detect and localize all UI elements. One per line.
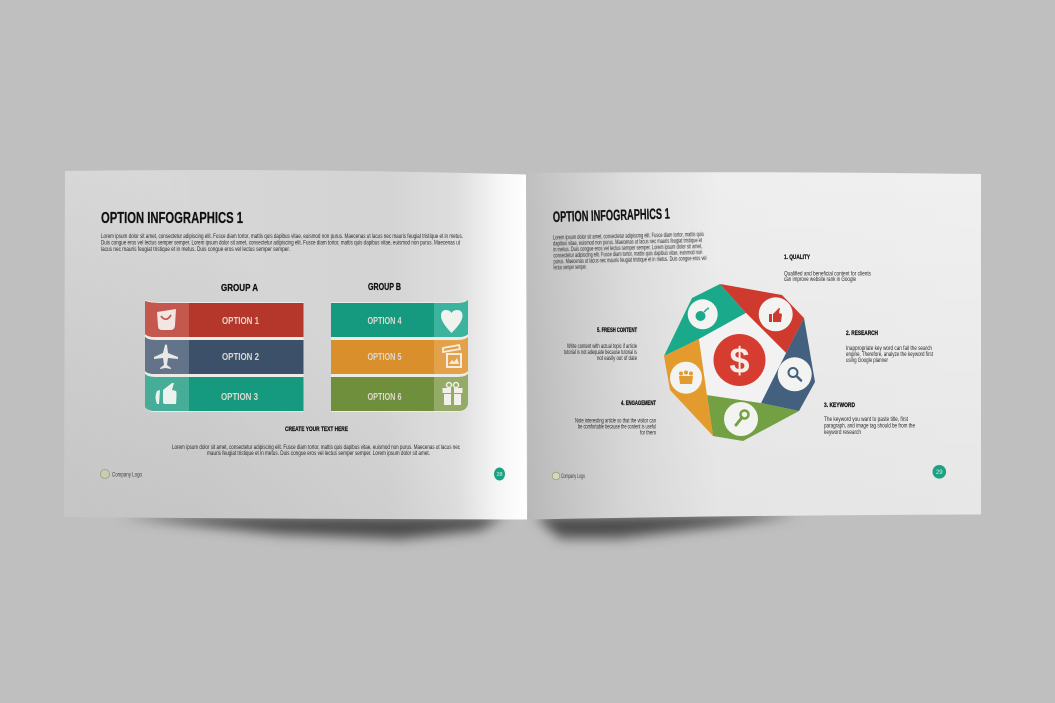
label: 5 fresh content: not easily out of date — [597, 356, 637, 362]
segment: green — [707, 395, 799, 441]
left page intro text: Duis congue eros vel lectus semper semper. Lorem ipsum dolor sit amet, consectetur adipiscing elit. Fusce diam tortor, mattis quis dapibus vitae, euismod non purus. Maecenas ut — [101, 240, 460, 246]
label: 4 engagement: 4. ENGAGEMENT — [621, 401, 656, 407]
left page intro text: Lorem ipsum dolor sit amet, consectetur adipiscing elit. Fusce diam tortor, mattis quis dapibus vitae, euismod non purus. Maecenas ut lacus nec mauris feugiat tristique et in metus. — [101, 234, 463, 240]
option 1 — [145, 301, 304, 337]
option 1: OPTION 1 — [222, 316, 259, 327]
right page heading: OPTION INFOGRAPHICS 1 — [553, 206, 670, 226]
left page tone overlay — [64, 170, 527, 520]
left page closing text: Lorem ipsum dolor sit amet, consectetur adipiscing elit. Fusce diam tortor, mattis quis dapibus vitae, euismod non purus. Maecenas ut lacus nec — [172, 445, 460, 451]
sub-heading: create your text: CREATE YOUR TEXT HERE — [285, 426, 348, 433]
heading: group A: GROUP A — [221, 283, 258, 294]
left page — [64, 170, 527, 520]
label: 4 engagement: Note interesting article so that the visitor can — [575, 418, 656, 424]
right company logo — [552, 472, 585, 480]
right page intro text: purus. Maecenas ut lacus nec mauris feugiat tristique et in metus. Duis congue eros vel — [553, 256, 707, 265]
left page number: 28 — [496, 472, 503, 478]
label: 2 research: 2. RESEARCH — [846, 331, 878, 337]
label: 5 fresh content — [564, 328, 637, 362]
right page number: 29 — [936, 470, 943, 476]
right page tone overlay — [528, 172, 981, 519]
option 2 — [145, 337, 304, 374]
panel: group A options — [145, 300, 304, 412]
icon: bomb — [688, 299, 718, 329]
label: 3 keyword: paragraph, and image tag should be from the — [824, 424, 915, 430]
option 2: OPTION 2 — [222, 352, 259, 363]
icon: key — [724, 402, 758, 436]
label: 3 keyword: The keyword you want to paste title, first — [824, 417, 908, 423]
label: 4 engagement — [575, 401, 656, 436]
right page intro text: consectetur adipiscing elit. Fusce diam tortor, mattis quis dapibus vitae, euismod non — [553, 250, 702, 259]
left company logo: Company Logo — [112, 472, 142, 478]
left page intro text — [101, 234, 463, 253]
label: 2 research: Inappropriate key word can fail the search — [846, 346, 932, 352]
right page intro text: lectus semper semper. — [554, 265, 587, 271]
label: 1 quality — [784, 255, 871, 283]
left page intro text: lacus nec mauris feugiat tristique et in metus. Duis congue eros vel lectus semper semper. — [101, 247, 290, 253]
segment: red — [720, 284, 804, 353]
right page — [528, 172, 981, 519]
label: 5 fresh content: 5. FRESH CONTENT — [597, 328, 637, 334]
left company logo — [100, 470, 142, 478]
shadow under brochure — [120, 514, 800, 539]
option 3 — [145, 374, 304, 411]
icon: dollar centre: $ — [729, 340, 750, 381]
label: 1 quality: Qualified and beneficial content for clients — [784, 272, 871, 278]
label: 5 fresh content: tutorial is not adequate because tutorial is — [564, 350, 637, 356]
label: 2 research — [846, 331, 933, 364]
heading: group B: GROUP B — [368, 282, 401, 293]
icon: thumbs up — [759, 297, 793, 331]
label: 3 keyword — [824, 403, 915, 436]
label: 3 keyword: 3. KEYWORD — [824, 403, 856, 409]
label: 3 keyword: keyword research — [824, 430, 861, 436]
left page closing text — [172, 445, 460, 457]
chart: heptagon wheel — [664, 284, 815, 441]
option 5: OPTION 5 — [368, 352, 402, 363]
segment: teal — [664, 284, 746, 356]
option 6: OPTION 6 — [368, 392, 402, 403]
label: 1 quality: 1. QUALITY — [784, 255, 810, 261]
icon: people group — [670, 362, 702, 394]
left page heading: OPTION INFOGRAPHICS 1 — [101, 210, 243, 227]
icon: magnifier — [778, 357, 812, 391]
right page number — [932, 465, 946, 479]
left page number — [494, 468, 505, 480]
right page intro text: in metus. Duis congue eros vel lectus semper semper. Lorem ipsum dolor sit amet, — [553, 244, 703, 253]
right page intro text — [553, 232, 707, 271]
label: 4 engagement: be comfortable because the content is useful — [578, 424, 656, 430]
option 4: OPTION 4 — [368, 316, 402, 327]
centre inner panel — [699, 313, 786, 403]
label: 5 fresh content: Write content with actual topic if article — [567, 344, 637, 350]
left page closing text: mauris feugiat tristique et in metus. Duis congue eros vel lectus semper semper. Lorem ipsum dolor sit amet. — [207, 451, 430, 457]
panel: group B options — [331, 299, 468, 412]
right page intro text: dapibus vitae, euismod non purus. Maecenas ut lacus nec mauris feugiat tristique et — [553, 238, 702, 247]
segment: blue — [761, 318, 815, 411]
label: 2 research: engine. Therefore, analyze the keyword first — [846, 352, 933, 358]
label: 2 research: using Google planner — [846, 358, 888, 364]
right page intro text: Lorem ipsum dolor sit amet, consectetur adipiscing elit. Fusce diam tortor, mattis quis — [553, 232, 704, 241]
label: 1 quality: can improve website rank in Google — [784, 277, 856, 283]
right company logo: Company Logo — [561, 474, 585, 480]
label: 4 engagement: for them — [640, 430, 656, 436]
icon: dollar centre — [714, 334, 766, 386]
option 3: OPTION 3 — [221, 392, 258, 403]
segment: orange — [664, 339, 713, 436]
